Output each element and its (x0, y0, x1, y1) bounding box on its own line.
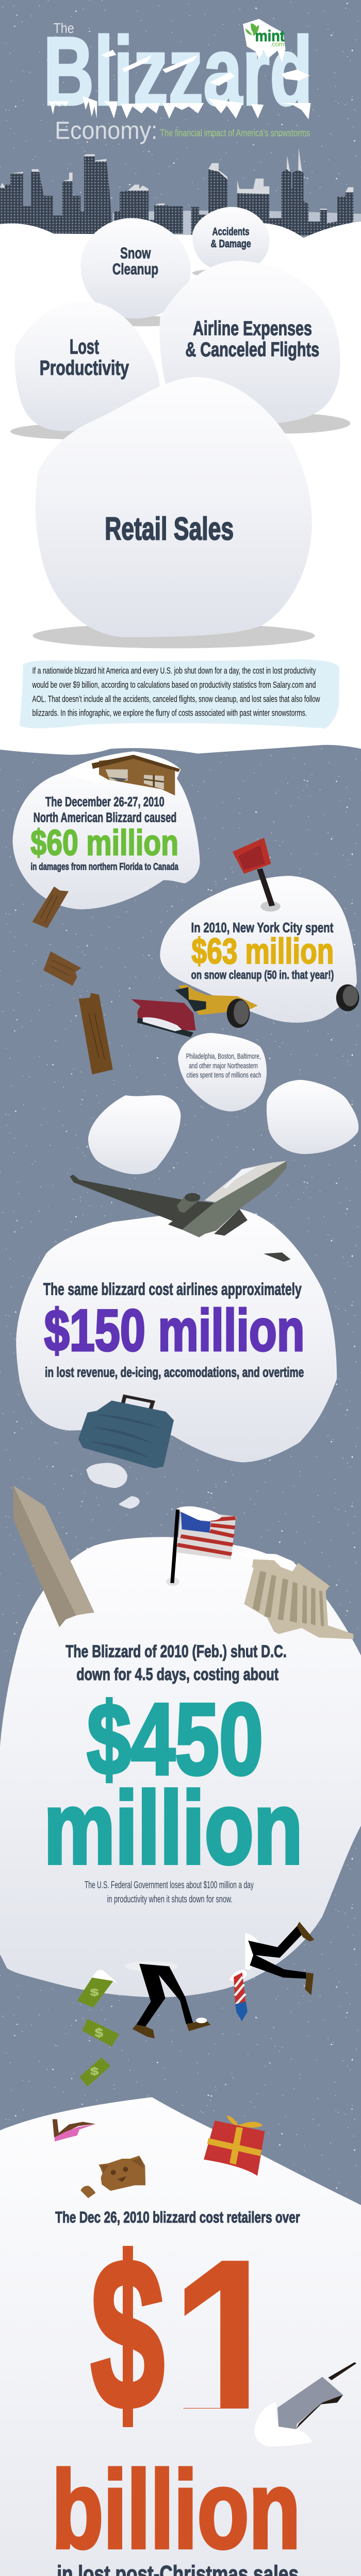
icon: falling dollar bills: $ (90, 2066, 99, 2077)
mint logo badge (243, 19, 286, 63)
stat: $60 million: $60 million (30, 822, 178, 863)
icon: necktie (229, 1970, 248, 2021)
snowball: small left (88, 1095, 180, 1174)
snowballs panel (10, 207, 350, 648)
icon: falling dollar bills: $ (95, 2026, 103, 2040)
icon: damaged house (62, 751, 180, 795)
panel: retail losses (0, 2097, 361, 2576)
snowball: accidents and damage: Accidents (212, 226, 249, 238)
icon: snow plow (131, 985, 359, 1037)
snow blob (13, 764, 200, 909)
city skyline (0, 148, 361, 755)
panel: airline cost (16, 1161, 337, 1509)
icon: capitol building (238, 1552, 353, 1639)
callout: other cities (178, 1033, 267, 1111)
snowball: airline expenses (159, 261, 350, 434)
icon: crashed airplane (70, 1161, 290, 1262)
snow blob (0, 1537, 361, 1997)
snowball: lost productivity (10, 301, 159, 439)
title: The: The (54, 20, 74, 36)
icon: cell phone (254, 2362, 356, 2447)
callout: other cities: cities spent tens of millions each (187, 1071, 261, 1079)
snow blob (160, 876, 357, 1023)
snowball: lost productivity: Lost (70, 335, 99, 358)
panel: December blizzard: North American Blizzard caused (34, 810, 176, 825)
callout: other cities: and other major Northeastern (189, 1061, 258, 1070)
stat: $450 million (44, 1683, 303, 1885)
snowball: snow cleanup (80, 218, 191, 326)
panel: New York cleanup (131, 838, 359, 1037)
icon: briefcase (78, 1396, 174, 1468)
mint logo badge: mint (255, 27, 285, 45)
icon: falling dollar bills (77, 1970, 119, 2087)
icicles (48, 50, 311, 120)
stat: $1 billion: $ (90, 2213, 165, 2454)
snowball: accidents and damage (192, 207, 269, 277)
stat: $1 billion: 1 (170, 2207, 290, 2487)
snow puffs (86, 1463, 140, 1509)
intro text box (20, 659, 339, 728)
icon: American flag (166, 1506, 236, 1586)
snowball: accidents and damage: & Damage (210, 238, 251, 250)
panel: December blizzard: in damages from northern Florida to Canada (30, 861, 178, 872)
panel: December blizzard: The December 26-27, 2010 (45, 794, 165, 809)
icon: Washington Monument (13, 1485, 94, 1627)
title block (43, 17, 313, 144)
icon: running legs (245, 1922, 314, 1995)
snowball: retail sales: Retail Sales (105, 511, 234, 547)
snowball: lost productivity: Productivity (40, 357, 129, 379)
panel: December blizzard (13, 751, 200, 909)
snowball: small right (267, 1080, 358, 1154)
title: Economy: Economy: (55, 116, 157, 144)
snow blob (0, 2097, 361, 2576)
icon: shovel (233, 838, 281, 911)
icon: falling dollar bills: $ (90, 1987, 99, 1998)
mint logo badge: .com (270, 41, 285, 48)
snowball: snow cleanup: Snow (120, 244, 151, 262)
panel: D.C. shutdown (0, 1485, 361, 1997)
icon: gift box (204, 2115, 265, 2176)
snow blob (16, 1209, 337, 1462)
planks of wood (32, 887, 113, 1075)
icon: walking legs (125, 1961, 210, 2039)
icon: high heel (53, 2119, 95, 2142)
panel: D.C. shutdown: in productivity when it shuts down for snow. (107, 1893, 233, 1905)
icon: teddy bear (80, 2156, 145, 2198)
callout: other cities: Philadelphia, Boston, Baltimore, (186, 1052, 261, 1060)
snowball: retail sales (32, 377, 315, 648)
snow ground (0, 222, 361, 755)
stat: $1 billion (56, 2246, 297, 2550)
snowball: snow cleanup: Cleanup (112, 260, 158, 278)
